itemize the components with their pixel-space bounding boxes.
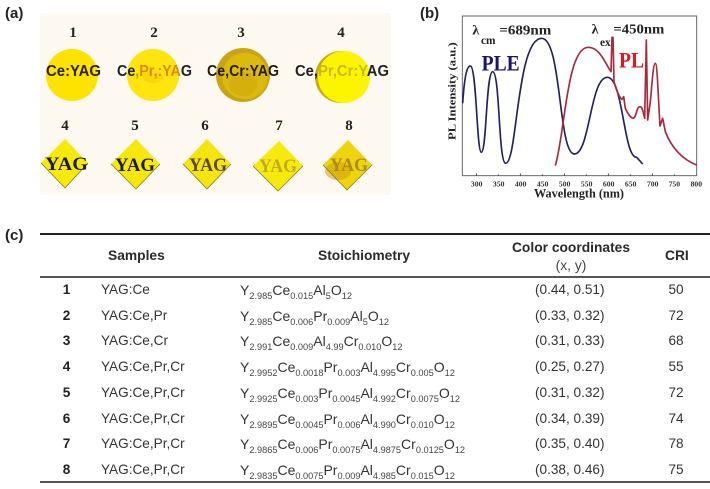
- row 5: 5: [63, 385, 70, 400]
- row two sample numbers: 7: [275, 118, 283, 134]
- row 8: 75: [668, 462, 684, 477]
- x axis tick labels: [471, 180, 702, 189]
- x axis tick labels: 450: [537, 180, 549, 189]
- diamond 7: YAG: [259, 156, 297, 177]
- row 1: YAG:Ce: [101, 282, 150, 297]
- row 5: [63, 385, 684, 404]
- row 4: [62, 359, 684, 378]
- row 5: YAG:Ce,Pr,Cr: [101, 385, 185, 400]
- row one sample numbers: [69, 25, 345, 41]
- row 7: 7: [63, 436, 70, 451]
- row 2: 72: [668, 308, 684, 323]
- row one sample numbers: 1: [69, 25, 77, 41]
- panel b: PL and PLE spectra chart: [447, 16, 702, 201]
- bottom rule: [40, 481, 710, 483]
- title lambda ex: ex: [600, 37, 611, 49]
- diamond 5: YAG: [115, 155, 155, 176]
- PLE label: PLE: [482, 51, 520, 76]
- disc 4: Ce,Pr,Cr:YAG: [295, 63, 389, 80]
- x axis title: Wavelength (nm): [534, 187, 624, 201]
- disc 1: Ce:YAG: [46, 63, 101, 80]
- row 3: YAG:Ce,Cr: [101, 333, 168, 348]
- x axis tick labels: 400: [515, 180, 527, 189]
- row two sample numbers: 6: [201, 118, 209, 134]
- diamond 8: YAG: [330, 155, 368, 176]
- row 5: 72: [668, 385, 684, 400]
- row 7: Y2.9865Ce0.006Pr0.0075Al4.9875Cr0.0125O12: [240, 436, 465, 455]
- row 2: (0.33, 0.32): [535, 308, 605, 323]
- row 2: [63, 308, 684, 327]
- panel label b: (b): [420, 5, 439, 22]
- diamond 6: [183, 139, 231, 189]
- row two sample numbers: 8: [345, 118, 353, 134]
- row 6: [63, 411, 684, 430]
- row 6: Y2.9895Ce0.0045Pr0.006Al4.990Cr0.010O12: [240, 411, 455, 430]
- PL curve: [555, 37, 697, 166]
- y axis title: PL Intensity (a.u.): [447, 42, 459, 140]
- row one sample numbers: 2: [150, 25, 158, 41]
- diamond 8: [323, 140, 372, 190]
- chart frame: [462, 16, 697, 176]
- row 3: 68: [668, 333, 684, 348]
- row one sample numbers: 3: [237, 25, 245, 41]
- x axis tick labels: 650: [625, 180, 637, 189]
- row two sample numbers: 5: [131, 118, 139, 134]
- row 5: (0.31, 0.32): [535, 385, 605, 400]
- row 3: Y2.991Ce0.009Al4.99Cr0.010O12: [240, 333, 402, 352]
- photo background: [40, 13, 391, 195]
- row 4: 55: [668, 359, 684, 374]
- PL label: PL: [619, 47, 644, 72]
- row 8: Y2.9835Ce0.0075Pr0.009Al4.985Cr0.015O12: [240, 462, 455, 481]
- x axis tick labels: 350: [493, 180, 505, 189]
- row 2: 2: [63, 308, 70, 323]
- header: CRI: CRI: [665, 248, 689, 263]
- x axis tick labels: 550: [581, 180, 593, 189]
- disc 1: [46, 49, 101, 101]
- panel label a: (a): [5, 5, 23, 22]
- row 7: YAG:Ce,Pr,Cr: [101, 436, 185, 451]
- disc 4: [295, 51, 389, 103]
- disc 2: Ce,Pr,:YAG: [117, 63, 192, 80]
- row 3: [63, 333, 684, 352]
- header: color coordinates: [512, 240, 630, 273]
- header: samples: Samples: [108, 248, 165, 263]
- header rule: [40, 276, 710, 278]
- diamond 7: [253, 141, 303, 191]
- row 2: YAG:Ce,Pr: [101, 308, 167, 323]
- row 1: Y2.985Ce0.015Al5O12: [240, 282, 352, 301]
- row 4: 4: [63, 359, 70, 374]
- row 8: 8: [63, 462, 70, 477]
- x axis tick labels: 700: [647, 180, 659, 189]
- header: color coordinates: Color coordinates: [512, 240, 630, 255]
- row 1: 50: [668, 282, 684, 297]
- title lambda em: λ: [472, 24, 479, 39]
- row 2: Y2.985Ce0.006Pr0.009Al5O12: [240, 308, 389, 327]
- title lambda ex: =450nm: [613, 23, 665, 38]
- title lambda em: =689nm: [499, 23, 552, 38]
- row 6: (0.34, 0.39): [535, 411, 605, 426]
- row 4: Y2.9952Ce0.0018Pr0.003Al4.995Cr0.005O12: [240, 359, 455, 378]
- row 1: [63, 282, 684, 301]
- panel a: photographs of samples: [40, 13, 391, 195]
- row 3: (0.31, 0.33): [535, 333, 605, 348]
- row 4: (0.25, 0.27): [535, 359, 605, 374]
- header: color coordinates: (x, y): [556, 258, 586, 273]
- x axis ticks: [477, 173, 674, 176]
- row 1: (0.44, 0.51): [535, 282, 605, 297]
- x axis tick labels: 750: [669, 180, 680, 189]
- row one sample numbers: 4: [337, 25, 345, 41]
- row 7: 78: [668, 436, 684, 451]
- row 8: (0.38, 0.46): [535, 462, 605, 477]
- row two sample numbers: 4: [61, 118, 69, 134]
- disc 3: Ce,Cr:YAG: [207, 63, 279, 80]
- row 6: YAG:Ce,Pr,Cr: [101, 411, 185, 426]
- row 6: 6: [63, 411, 70, 426]
- row 7: (0.35, 0.40): [535, 436, 605, 451]
- title lambda em: [472, 23, 552, 47]
- row 6: 74: [668, 411, 684, 426]
- disc 2: [117, 49, 192, 101]
- x axis tick labels: 600: [603, 180, 615, 189]
- diamond 4: YAG: [45, 154, 88, 175]
- x axis tick labels: 500: [559, 180, 571, 189]
- top rule: [40, 233, 710, 234]
- row 1: 1: [63, 282, 70, 297]
- diamond 4: [41, 139, 88, 188]
- row 8: [63, 462, 684, 481]
- title lambda ex: λ: [592, 23, 599, 38]
- table: sample data: [40, 233, 710, 483]
- panel label c: (c): [5, 227, 23, 244]
- x axis tick labels: 800: [691, 180, 702, 189]
- PLE curve: [463, 38, 643, 164]
- row two sample numbers: [61, 118, 353, 134]
- title lambda em: cm: [481, 35, 496, 47]
- row 8: YAG:Ce,Pr,Cr: [101, 462, 185, 477]
- diamond 5: [111, 139, 160, 189]
- row 7: [63, 436, 684, 455]
- title lambda ex: [592, 23, 665, 49]
- disc 3: [207, 48, 279, 102]
- x axis tick labels: 300: [471, 180, 483, 189]
- row 4: YAG:Ce,Pr,Cr: [101, 359, 185, 374]
- header: stoichiometry: Stoichiometry: [318, 248, 410, 263]
- row 3: 3: [63, 333, 70, 348]
- diamond 6: YAG: [189, 155, 227, 176]
- row 5: Y2.9925Ce0.003Pr0.0045Al4.992Cr0.0075O12: [240, 385, 460, 404]
